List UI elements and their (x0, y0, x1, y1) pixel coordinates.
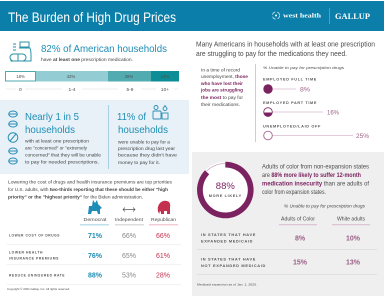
chart: unable to pay by employment (263, 65, 369, 140)
stacked bar: 14% (161, 74, 169, 79)
table: medicaid (197, 204, 377, 274)
right heading: are struggling to pay for the medications they need. (196, 51, 347, 58)
row: not expanded: IN STATES THAT HAVE (201, 258, 256, 262)
row: employed part time (263, 101, 339, 117)
party headers: Independent (115, 217, 144, 222)
table: medicaid: % Unable to pay for prescription drugs (284, 204, 366, 208)
row: lower health premiums: 65% (122, 253, 136, 260)
row: employed part time: EMPLOYED PART TIME (263, 101, 317, 105)
text: priorities paragraph: priority" or the "highest priority" for the Biden administration. (8, 194, 143, 200)
panel: households: households (118, 124, 168, 136)
icon: pill bottle (10, 42, 31, 61)
row: not expanded: 15% (293, 260, 308, 266)
row: reduce uninsured: 28% (156, 272, 170, 280)
row: employed part time: 16% (327, 110, 339, 116)
row: not expanded: NOT EXPANDED MEDICAID (201, 264, 266, 268)
text: concerned: are "concerned" or "extremely (25, 146, 88, 150)
text: unemployment: In a time of record (201, 68, 241, 72)
panel: households (0, 100, 189, 174)
right heading (196, 42, 375, 58)
text: adults of color: Adults of color from non-expansion states (262, 164, 369, 170)
row: not expanded (201, 258, 361, 268)
row: reduce uninsured (9, 272, 170, 280)
row: lower cost of drugs: 66% (156, 233, 170, 240)
right heading: Many Americans in households with at least one prescription (196, 42, 375, 48)
row: unemployed (263, 124, 369, 140)
table: priorities by party (7, 233, 181, 284)
row: expanded: 8% (295, 236, 306, 242)
text: adults of color (262, 164, 369, 196)
row: not expanded: 13% (346, 260, 361, 266)
bar axis: 10+ (161, 87, 169, 93)
footnote: Medicaid expansion as of Jan. 1, 2020. (197, 282, 257, 286)
panel: households: households (25, 124, 75, 136)
text: unemployment: their medications. (201, 102, 240, 107)
table: medicaid: White adults (337, 216, 366, 222)
stacked bar: 42% (67, 74, 75, 79)
text: adults of color: color from expansion states. (262, 190, 326, 196)
row: employed full time: 8% (300, 86, 310, 94)
donut 88 percent: 88% (216, 181, 235, 192)
row: reduce uninsured: 53% (122, 272, 136, 280)
text: unable to pay: money to pay for it. (118, 160, 160, 165)
text: concerned: to pay for needed prescriptions. (25, 160, 99, 164)
row: lower cost of drugs: 66% (122, 233, 136, 240)
stacked bar: 26% (125, 74, 133, 79)
text: unable to pay: prescription drug last year (118, 146, 176, 151)
row: expanded: 10% (346, 236, 361, 242)
icon: elephant (158, 201, 170, 214)
stacked bar: 18% (16, 74, 25, 79)
icon: double arrow (123, 208, 135, 212)
row: reduce uninsured: 88% (88, 272, 103, 280)
stacked bar (6, 71, 179, 82)
text: unemployment: the most to pay for (201, 95, 244, 100)
text: priorities paragraph: for U.S. adults, with two-thirds reporting that these should be either "high (8, 187, 168, 192)
copyright: Copyright © 2021 Gallup, Inc. All rights reserved. (7, 287, 70, 291)
text: priorities paragraph: Lowering the cost of drugs and health insurance premiums are top priorities (8, 180, 173, 184)
text: concerned: with at least one prescription (25, 138, 90, 144)
bar axis: 0 (19, 87, 22, 93)
logos: GALLUP (335, 12, 370, 21)
party headers (80, 217, 178, 226)
icon: pills column (8, 111, 18, 164)
row: unemployed: 25% (356, 133, 369, 140)
logos: west health (283, 14, 322, 20)
icon: donkey (88, 200, 102, 214)
text: unable to pay (118, 140, 178, 165)
chart: unable to pay by employment: % Unable to pay for prescription drugs (263, 65, 344, 70)
row: unemployed: UNEMPLOYED/LAID OFF (263, 124, 321, 128)
heading: 11 percent: 11% of (117, 111, 146, 123)
row: lower health premiums: 76% (88, 253, 103, 260)
text: unable to pay: were unable to pay for a (118, 140, 171, 144)
text: unemployment: jobs are struggling (200, 88, 243, 93)
text: unable to pay: because they didn't have (118, 152, 178, 158)
row: employed full time: EMPLOYED FULL TIME (263, 78, 317, 82)
text: unemployment (200, 68, 249, 107)
row: lower health premiums: INSURANCE PREMIUMS (9, 256, 59, 260)
donut 88 percent (197, 162, 254, 218)
logos (272, 8, 370, 24)
text: unemployment: unemployment, those (201, 74, 249, 79)
bar axis: 5-9 (127, 87, 134, 93)
donut 88 percent: MORE LIKELY (209, 194, 242, 198)
table: medicaid: Adults of Color (281, 216, 315, 222)
text: concerned: concerned" that they will be unable (25, 152, 102, 158)
party headers: Democrat (84, 217, 107, 222)
text: unemployment: who have lost their (200, 81, 243, 86)
text: adults of color: are 88% more likely to suffer 12-month (262, 173, 361, 179)
row: lower cost of drugs: LOWER COST OF DRUGS (9, 234, 60, 238)
row: lower health premiums (9, 250, 170, 260)
party headers: Republican (151, 217, 176, 222)
heading: nearly 1 in 5: Nearly 1 in 5 (25, 111, 79, 123)
row: reduce uninsured: REDUCE UNINSURED RATE (9, 274, 65, 278)
text: concerned (25, 138, 102, 164)
text: priorities paragraph (8, 180, 173, 200)
bar axis (6, 87, 178, 93)
row: expanded: EXPANDED MEDICAID (201, 240, 253, 244)
row: lower cost of drugs: 71% (88, 233, 103, 240)
icon: bottles (153, 106, 168, 119)
title: The Burden of High Drug Prices (8, 10, 176, 25)
heading: 82 percent: 82% of American households (41, 44, 167, 55)
text: adults of color: medication insecurity than are adults of (262, 182, 369, 188)
header banner (0, 1, 384, 31)
row: lower cost of drugs (9, 233, 170, 240)
panel: medicaid expansion (192, 152, 384, 296)
row: expanded: IN STATES THAT HAVE (201, 233, 256, 237)
row: lower health premiums: LOWER HEALTH (9, 250, 43, 254)
row: employed full time (263, 78, 317, 94)
row: expanded (201, 233, 361, 244)
subtext: prescription: have at least one prescription medication. (41, 57, 133, 62)
row: lower health premiums: 61% (156, 253, 170, 260)
bar axis: 1-4 (69, 87, 76, 93)
